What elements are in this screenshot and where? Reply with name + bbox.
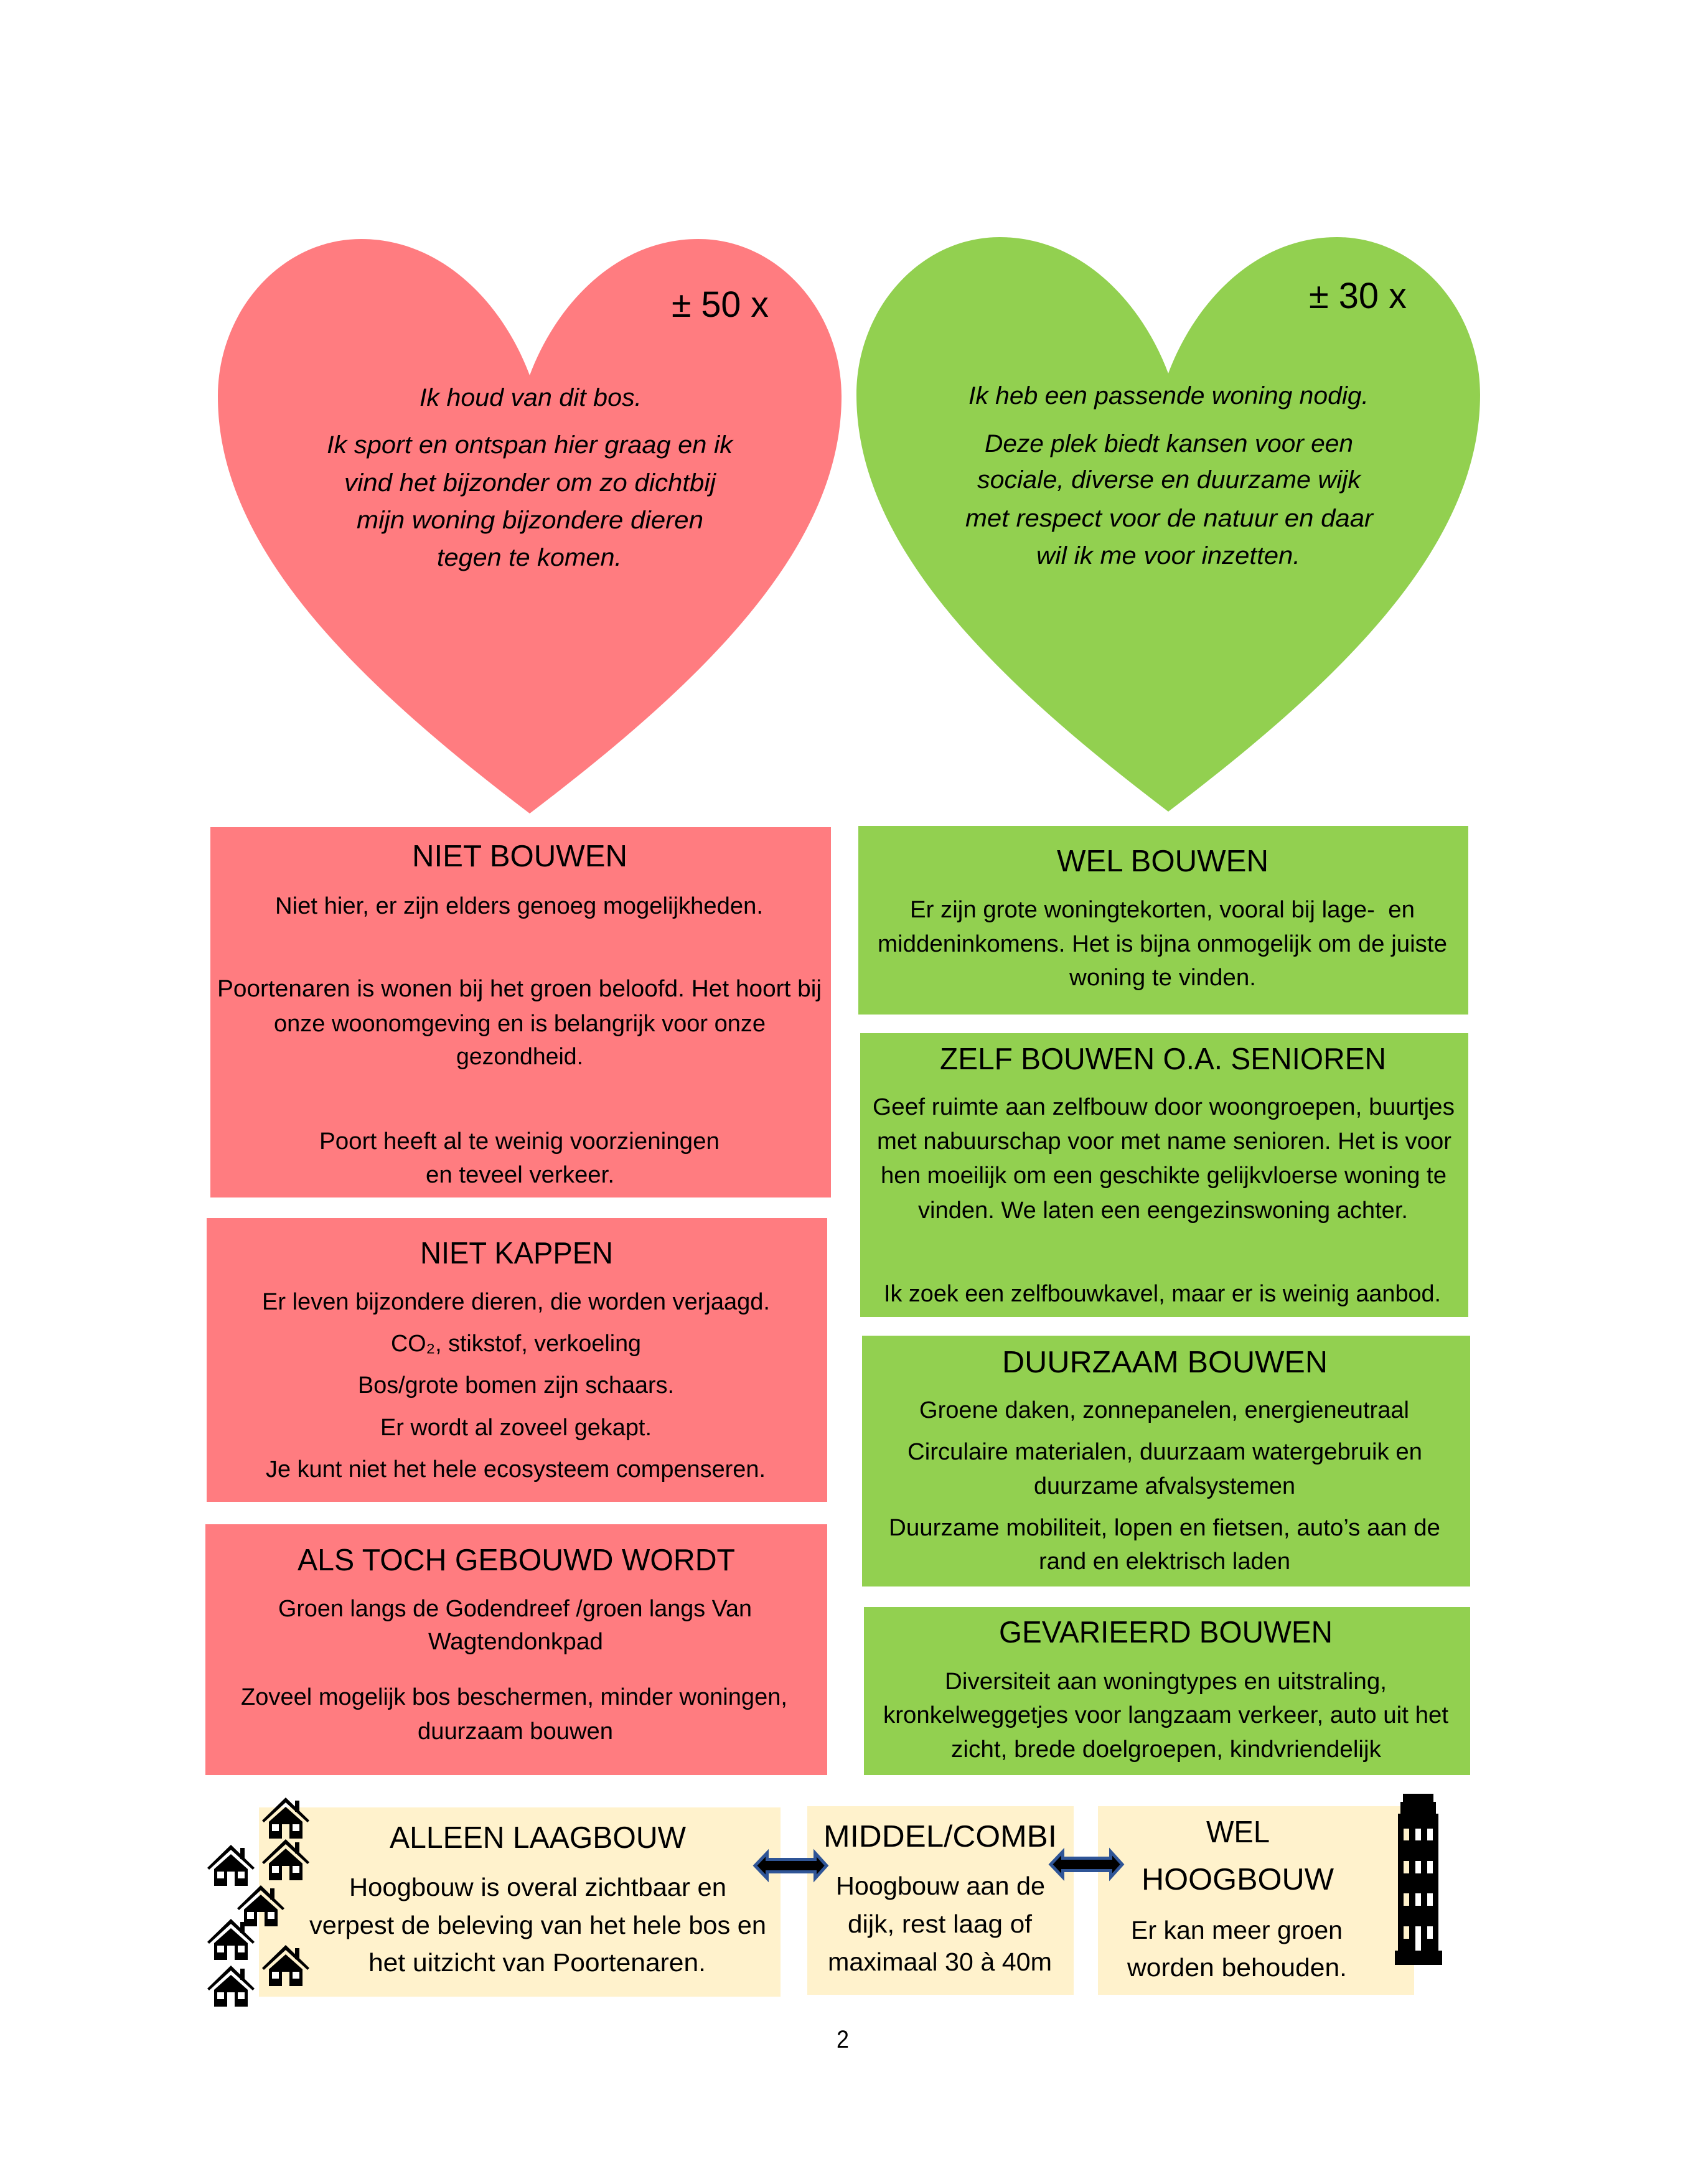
count: about 50 times: ± 50 x [672,284,769,325]
arrow: laagbouw to middel [755,1853,827,1878]
count: about 30 times: ± 30 x [1309,276,1407,316]
text: alleen laagbouw argument [309,1873,766,1977]
text: zelf bouwen arguments: Ik zoek een zelfbouwkavel, maar er is weinig aanbod. [884,1281,1441,1307]
heading: duurzaam bouwen: DUURZAAM BOUWEN [1002,1346,1328,1379]
heart text: need for a home: sociale, diverse en duurzame wijk [977,466,1362,494]
text: niet bouwen arguments: Poortenaren is wonen bij het groen beloofd. Het hoort bij [217,976,822,1002]
heart: niet bouwen [218,239,842,813]
text: middel/combi argument: Hoogbouw aan de [836,1872,1045,1900]
panel: alleen laagbouw [259,1807,781,1997]
text: gevarieerd bouwen arguments: zicht, brede doelgroepen, kindvriendelijk [951,1736,1382,1763]
text: zelf bouwen arguments [873,1094,1455,1307]
text: middel/combi argument: maximaal 30 à 40m [828,1947,1052,1976]
text: gevarieerd bouwen arguments: Diversiteit aan woningtypes en uitstraling, [945,1669,1387,1695]
panel: zelf bouwen [860,1033,1468,1317]
heading: wel bouwen: WEL BOUWEN [1057,845,1268,878]
text: zelf bouwen arguments: vinden. We laten een eengezinswoning achter. [918,1197,1408,1224]
text: zelf bouwen arguments: Geef ruimte aan zelfbouw door woongroepen, buurtjes [873,1094,1455,1120]
text: duurzaam bouwen arguments: duurzame afvalsystemen [1034,1473,1295,1499]
text: duurzaam bouwen arguments: Circulaire materialen, duurzaam watergebruik en [907,1439,1422,1465]
icon: high-rise tower [1395,1794,1442,1965]
page number: 2 [837,2026,849,2053]
heart text: need for a home: Deze plek biedt kansen voor een [985,430,1353,457]
text: gevarieerd bouwen arguments [883,1669,1448,1763]
text: alleen laagbouw argument: het uitzicht van Poortenaren. [368,1948,706,1977]
text: duurzaam bouwen arguments [889,1397,1440,1575]
text: wel bouwen arguments [878,897,1447,991]
text: als toch gebouwd wordt conditions: Wagtendonkpad [428,1629,603,1655]
text: als toch gebouwd wordt conditions: duurzaam bouwen [418,1718,613,1745]
text: middel/combi argument [828,1872,1052,1976]
text: duurzaam bouwen arguments: rand en elektrisch laden [1039,1549,1290,1575]
panel: niet bouwen [210,827,831,1197]
text: niet kappen arguments: Je kunt niet het hele ecosysteem compenseren. [266,1456,766,1483]
heart text: need for a home: Ik heb een passende woning nodig. [968,382,1369,410]
panel: niet kappen [207,1218,827,1502]
text: duurzaam bouwen arguments: Duurzame mobiliteit, lopen en fietsen, auto’s aan de [889,1515,1440,1541]
heading: wel hoogbouw [1142,1816,1334,1896]
heart text: love for the forest: Ik houd van dit bos. [420,384,642,411]
text: gevarieerd bouwen arguments: kronkelweggetjes voor langzaam verkeer, auto uit het [883,1702,1448,1728]
text: als toch gebouwd wordt conditions: Zoveel mogelijk bos beschermen, minder woningen, [241,1684,787,1710]
panel: wel bouwen [858,826,1468,1015]
text: wel hoogbouw argument: Er kan meer groen [1131,1916,1343,1944]
heading: zelf bouwen o.a. senioren: ZELF BOUWEN O.A. SENIOREN [940,1043,1386,1076]
text: zelf bouwen arguments: hen moeilijk om een geschikte gelijkvloerse woning te [881,1163,1447,1189]
text: niet bouwen arguments: gezondheid. [456,1044,583,1070]
text: niet kappen arguments [262,1289,770,1483]
text: niet kappen arguments: CO₂, stikstof, verkoeling [391,1331,641,1357]
panel: als toch gebouwd wordt [205,1524,827,1775]
text: niet bouwen arguments: onze woonomgeving en is belangrijk voor onze [274,1011,766,1037]
arrow: middel to hoogbouw [1051,1852,1122,1877]
heading: als toch gebouwd wordt: ALS TOCH GEBOUWD WORDT [298,1544,735,1577]
heart text: love for the forest: Ik sport en ontspan hier graag en ik [327,431,734,459]
panel: duurzaam bouwen [862,1336,1470,1586]
heart text: need for a home: met respect voor de natuur en daar [965,505,1374,532]
heading: wel hoogbouw: WEL [1206,1816,1270,1849]
panel: wel hoogbouw [1098,1806,1414,1995]
icon: group of low houses [207,1797,309,2007]
heart text: love for the forest [327,384,734,571]
text: wel bouwen arguments: middeninkomens. Het is bijna onmogelijk om de juiste [878,931,1447,957]
text: niet bouwen arguments: Poort heeft al te weinig voorzieningen [319,1128,720,1155]
heart text: love for the forest: tegen te komen. [437,544,622,571]
heart text: love for the forest: vind het bijzonder om zo dichtbij [344,469,716,497]
heading: niet kappen: NIET KAPPEN [420,1237,613,1270]
text: wel hoogbouw argument: worden behouden. [1127,1953,1347,1982]
text: niet bouwen arguments [217,893,822,1188]
text: niet bouwen arguments: Niet hier, er zijn elders genoeg mogelijkheden. [275,893,763,919]
text: wel bouwen arguments: Er zijn grote woningtekorten, vooral bij lage- en [910,897,1415,923]
heart text: love for the forest: mijn woning bijzondere dieren [357,507,703,534]
heading: wel hoogbouw: HOOGBOUW [1142,1863,1334,1896]
heading: alleen laagbouw: ALLEEN LAAGBOUW [390,1821,687,1855]
panel: middel/combi [807,1806,1074,1995]
heart text: need for a home [965,382,1374,569]
text: wel hoogbouw argument [1127,1916,1347,1982]
text: niet bouwen arguments: en teveel verkeer. [426,1162,614,1188]
heart text: need for a home: wil ik me voor inzetten. [1036,542,1300,569]
text: alleen laagbouw argument: Hoogbouw is overal zichtbaar en [349,1873,726,1901]
heading: niet bouwen: NIET BOUWEN [412,840,627,873]
text: niet kappen arguments: Er wordt al zoveel gekapt. [380,1415,652,1441]
heading: gevarieerd bouwen: GEVARIEERD BOUWEN [999,1616,1333,1649]
text: middel/combi argument: dijk, rest laag of [848,1910,1033,1938]
text: duurzaam bouwen arguments: Groene daken, zonnepanelen, energieneutraal [919,1397,1409,1423]
text: wel bouwen arguments: woning te vinden. [1069,965,1256,991]
text: als toch gebouwd wordt conditions: Groen langs de Godendreef /groen langs Van [278,1596,752,1622]
heart: wel bouwen [856,237,1480,812]
panel: gevarieerd bouwen [864,1607,1470,1775]
heading: middel/combi: MIDDEL/COMBI [823,1820,1057,1854]
text: als toch gebouwd wordt conditions [241,1596,787,1745]
text: zelf bouwen arguments: met nabuurschap voor met name senioren. Het is voor [877,1128,1451,1155]
text: niet kappen arguments: Bos/grote bomen zijn schaars. [358,1372,674,1399]
text: niet kappen arguments: Er leven bijzondere dieren, die worden verjaagd. [262,1289,770,1315]
text: alleen laagbouw argument: verpest de beleving van het hele bos en [309,1911,766,1939]
